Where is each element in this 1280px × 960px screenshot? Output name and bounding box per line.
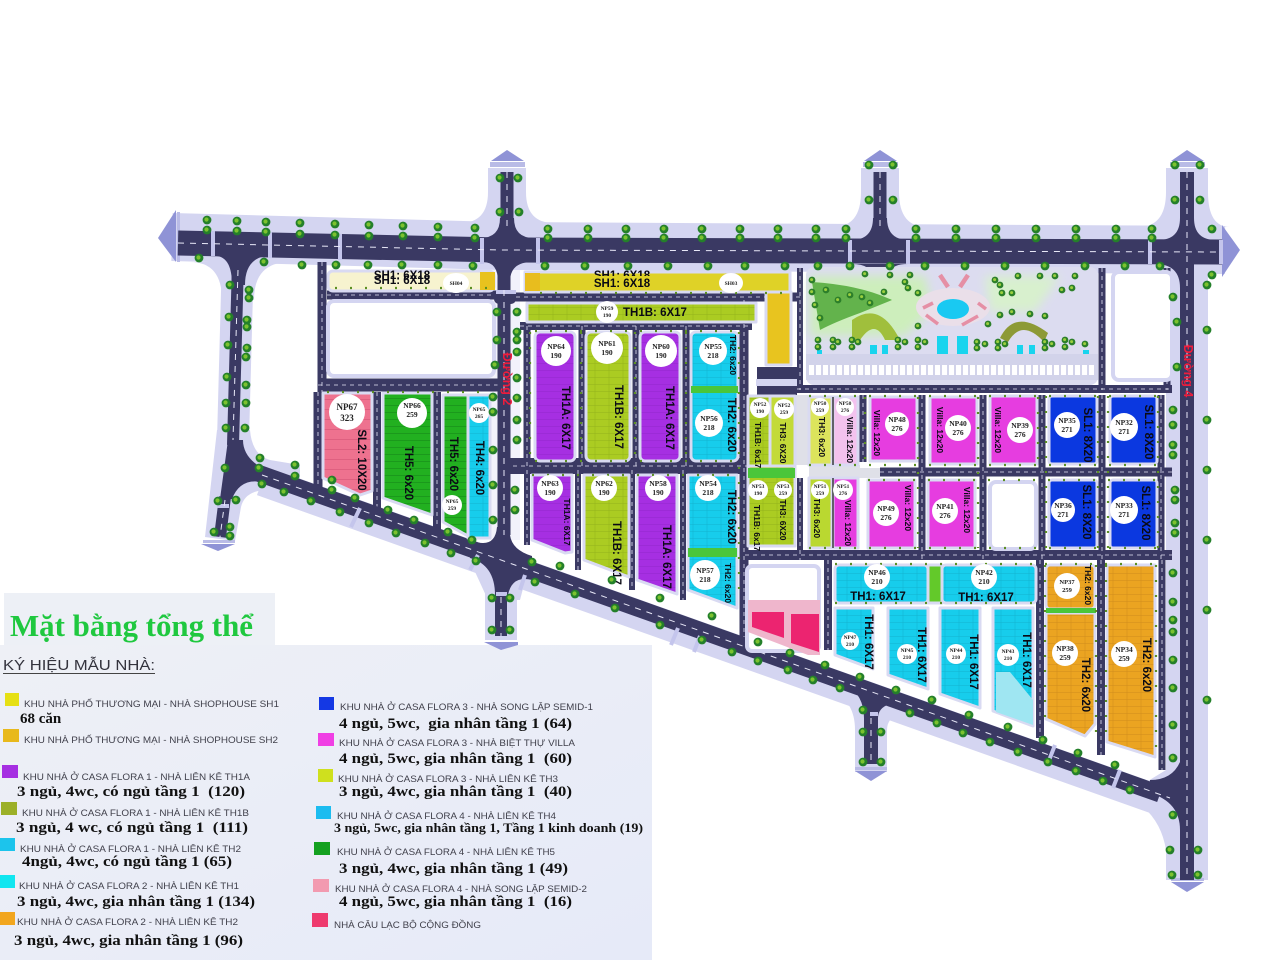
legend: SH1	[5, 693, 279, 727]
legend: club	[312, 913, 481, 930]
legend: TH2 flora 1: 4ngủ, 4wc, có ngủ tầng 1 (65)	[22, 854, 232, 870]
block labels: TH2: 6x20	[725, 398, 737, 452]
block: TH4 east	[468, 395, 490, 538]
legend: SEMID-2	[313, 879, 587, 910]
block: NP48	[870, 397, 917, 461]
block: NP40	[930, 397, 977, 464]
plot number markers: NP51	[837, 484, 850, 490]
block: TH1B mid lower	[748, 466, 795, 546]
plot number markers: NP58	[649, 479, 667, 488]
legend: SH2	[3, 729, 278, 745]
plot number markers: NP40	[949, 419, 967, 428]
legend: TH2 flora 1	[0, 838, 241, 870]
plot number markers: 210	[871, 577, 883, 586]
plot number markers: NP53	[777, 484, 790, 490]
plot number markers: NP34	[1115, 645, 1133, 654]
plot number markers: NP53	[752, 484, 765, 490]
block labels: TH3: 6x20	[812, 498, 822, 538]
plot number markers: 271	[1057, 510, 1069, 519]
plot number markers: NP48	[888, 415, 906, 424]
block: NP61	[586, 332, 630, 461]
legend: TH3: KHU NHÀ Ở CASA FLORA 3 - NHÀ LIÊN KÊ TH3	[338, 773, 558, 784]
plot number markers: SH04	[450, 281, 463, 287]
plot number markers: NP57	[696, 566, 714, 575]
plot number markers: 276	[1014, 430, 1026, 439]
junction fillets	[480, 218, 534, 238]
block: NP43	[993, 608, 1033, 726]
plot number markers: 190	[603, 313, 611, 319]
block labels: Villa: 12x20	[843, 500, 853, 546]
block: NP64	[535, 332, 575, 461]
plot number markers: NP66	[403, 401, 421, 410]
plot number markers: NP44	[950, 648, 963, 654]
plot number markers: NP67	[336, 402, 358, 412]
south road cap overlapping legend	[484, 642, 518, 650]
block: TH3 north	[809, 397, 832, 465]
legend: SEMID-1	[319, 697, 593, 732]
park: pool	[937, 299, 969, 319]
block: NP42	[942, 565, 1036, 603]
legend: TH5: 3 ngủ, 4wc, gia nhân tầng 1 (49)	[339, 861, 568, 877]
block labels: Villa: 12x20	[845, 417, 855, 463]
legend: TH1A: KHU NHÀ Ở CASA FLORA 1 - NHÀ LIÊN KÊ TH1A	[23, 771, 250, 782]
block labels: TH1B: 6x17	[753, 422, 763, 468]
block: NP44	[940, 608, 980, 708]
block: NP33	[1110, 480, 1157, 548]
label: SH1: SH1: 6X18	[374, 270, 431, 282]
block labels: TH2: 6x20	[723, 563, 733, 603]
block: NP49	[868, 480, 915, 548]
plot number markers: 259	[816, 408, 824, 414]
plot number markers: NP39	[1011, 421, 1029, 430]
plot number markers: NP36	[1054, 501, 1072, 510]
block labels: TH2: 6x20	[1140, 638, 1152, 692]
block: NP39	[990, 396, 1037, 464]
block labels: TH1B: 6x17	[752, 505, 762, 551]
plot number markers: 323	[340, 413, 354, 423]
block: NP35	[1049, 396, 1097, 464]
block: villa divider lines	[832, 397, 834, 548]
block labels: TH5: 6x20	[402, 446, 414, 500]
block labels	[355, 270, 1154, 712]
plot number markers: NP46	[868, 568, 886, 577]
plot number markers: NP62	[595, 479, 613, 488]
legend: VILLA: KHU NHÀ Ở CASA FLORA 3 - NHÀ BIỆT THỰ VILLA	[339, 737, 575, 748]
block: NP38	[1046, 613, 1095, 736]
block labels: Villa: 12x20	[962, 487, 972, 533]
plot number markers: NP42	[975, 568, 993, 577]
block: NP46	[835, 565, 928, 603]
panel: central park	[806, 267, 1098, 385]
legend: TH1A: 3 ngủ, 4wc, có ngủ tầng 1 (120)	[17, 784, 245, 800]
block: NP34	[1107, 565, 1155, 757]
plot number markers: 190	[754, 491, 762, 497]
legend: TH1B	[1, 802, 249, 836]
legend: TH5	[314, 842, 568, 877]
legend: TH2 flora 2	[0, 912, 243, 949]
plot number markers: 190	[655, 351, 667, 360]
road name labels	[500, 345, 1195, 405]
block labels: TH2: 6x20	[1079, 658, 1091, 712]
plot number markers: 271	[1118, 510, 1130, 519]
block: NP55	[691, 332, 738, 461]
block labels: TH1: 6X17	[967, 634, 979, 690]
label: Đường 4: Đường 4	[1181, 345, 1195, 397]
block labels: TH1: 6X17	[1020, 632, 1032, 688]
plot number markers: 259	[816, 491, 824, 497]
plot number markers: NP47	[844, 635, 857, 641]
plot number markers: 259	[780, 410, 788, 416]
legend: TH1 flora 2	[0, 875, 255, 910]
legend: TH3	[318, 769, 572, 800]
legend: TH4: 3 ngủ, 5wc, gia nhân tầng 1, Tầng 1 kinh doanh (19)	[334, 821, 643, 835]
plot number markers: NP51	[814, 484, 827, 490]
block labels: TH3: 6X20	[778, 499, 788, 541]
block labels: TH1B: 6X17	[623, 307, 687, 319]
block: TH5 east	[443, 395, 468, 536]
plot number markers: 210	[952, 655, 960, 661]
block: SH2	[766, 292, 791, 365]
block labels: TH1A: 6X17	[562, 498, 572, 546]
plot number markers: NP37	[1059, 579, 1075, 586]
block labels: Villa: 12x20	[935, 407, 945, 453]
plot number markers: 276	[891, 424, 903, 433]
block: Villa north	[833, 397, 858, 465]
legend: SEMID-2: KHU NHÀ Ở CASA FLORA 4 - NHÀ SONG LẬP SEMID-2	[335, 883, 587, 894]
plot number markers: NP54	[699, 479, 717, 488]
block: NP47	[835, 608, 873, 669]
legend: TH2 flora 2: 3 ngủ, 4wc, gia nhân tầng 1 (96)	[14, 933, 243, 949]
service road lane markings	[318, 262, 1172, 770]
plot number markers	[329, 273, 1138, 667]
park: plaza	[916, 288, 990, 326]
plot number markers: NP52	[778, 403, 791, 409]
legend: TH1 flora 2: KHU NHÀ Ở CASA FLORA 2 - NHÀ LIÊN KÊ TH1	[19, 880, 239, 891]
plot number markers: 218	[702, 488, 714, 497]
plot number markers: 190	[544, 488, 556, 497]
plot number markers: NP59	[601, 306, 614, 312]
plot number markers: NP52	[754, 402, 767, 408]
plot number markers: 259	[1118, 654, 1130, 663]
pale plaza between blocks	[796, 395, 880, 478]
block: SL2	[323, 393, 372, 495]
legend: SEMID-1: KHU NHÀ Ở CASA FLORA 3 - NHÀ SONG LẬP SEMID-1	[340, 701, 593, 712]
plot number markers: NP45	[901, 648, 914, 654]
block: TH5 west	[383, 393, 432, 515]
block: community club	[748, 600, 820, 655]
block labels: Villa: 12x20	[903, 485, 913, 531]
block: NP54	[688, 475, 737, 608]
legend: TH1 flora 2: 3 ngủ, 4wc, gia nhân tầng 1 (134)	[17, 894, 255, 910]
block labels: SL1: 8X20	[1081, 408, 1093, 462]
plot number markers: NP49	[877, 504, 895, 513]
block labels: SL1: 8X20	[1142, 405, 1154, 459]
block labels: TH1A: 6X17	[660, 525, 672, 589]
legend: SEMID-1: 4 ngủ, 5wc, gia nhân tầng 1 (64)	[339, 716, 572, 732]
plot number markers: 276	[939, 511, 951, 520]
legend heading: KÝ HIỆU MẪU NHÀ:	[3, 657, 155, 674]
plot number markers: SH03	[725, 281, 738, 287]
plot number markers: 190	[652, 488, 664, 497]
lot blocks	[323, 271, 1157, 757]
plot number markers: NP50	[839, 401, 852, 407]
plot number markers: NP33	[1115, 501, 1133, 510]
road network: sidewalks	[172, 168, 1230, 880]
plot number markers: NP65	[446, 499, 459, 505]
plot number markers: 276	[839, 491, 847, 497]
plot number markers: NP38	[1056, 644, 1074, 653]
plot number markers: NP61	[598, 339, 616, 348]
crosswalks	[213, 231, 1221, 788]
park: green lawn	[812, 282, 892, 330]
block labels: TH3: 6X20	[778, 422, 788, 464]
plot number markers: 218	[707, 351, 719, 360]
legend: TH3: 3 ngủ, 4wc, gia nhân tầng 1 (40)	[339, 784, 572, 800]
plot number markers: NP64	[547, 342, 565, 351]
plot number markers: 190	[756, 409, 764, 415]
block: NP58	[637, 475, 677, 594]
legend: TH1B: KHU NHÀ Ở CASA FLORA 1 - NHÀ LIÊN KÊ TH1B	[22, 807, 249, 818]
block labels: TH1: 6X17	[958, 592, 1014, 604]
block: NP41	[928, 480, 975, 548]
plot number markers: 265	[475, 414, 483, 420]
panel: legend	[0, 645, 652, 960]
plot number markers: 276	[952, 428, 964, 437]
white reserve lots	[328, 272, 1172, 651]
legend: TH5: KHU NHÀ Ở CASA FLORA 4 - NHÀ LIÊN KÊ TH5	[337, 846, 555, 857]
legend: SEMID-2: 4 ngủ, 5wc, gia nhân tầng 1 (16)	[339, 894, 572, 910]
label: Đường 2: Đường 2	[500, 353, 514, 405]
title: Mặt bằng tổng thể	[10, 608, 254, 643]
plot number markers: NP55	[704, 342, 722, 351]
plot number markers: 218	[699, 575, 711, 584]
block: TH1B mid upper	[748, 396, 770, 466]
plot number markers: NP63	[541, 479, 559, 488]
park: east crescent	[1000, 322, 1048, 342]
block labels: TH4: 6x20	[473, 441, 485, 495]
block: TH3 mid upper	[770, 396, 795, 466]
legend: club: NHÀ CÂU LẠC BỘ CỘNG ĐỒNG	[334, 919, 481, 930]
block labels: SH1: 6X18	[594, 278, 651, 290]
block labels: TH1B: 6X17	[610, 521, 622, 585]
block: TH1 divider	[928, 565, 942, 603]
legend: VILLA	[318, 733, 575, 767]
legend: TH2 flora 2: KHU NHÀ Ở CASA FLORA 2 - NHÀ LIÊN KÊ TH2	[17, 916, 238, 927]
block labels: SL1: 8X20	[1139, 486, 1151, 540]
block: NP32	[1110, 396, 1157, 464]
block labels: TH1: 6X17	[862, 614, 874, 670]
plot number markers: NP50	[814, 401, 827, 407]
block: NP43 pale part	[996, 672, 1033, 725]
block: TH1B top	[527, 303, 756, 322]
plot number markers: 271	[1061, 425, 1073, 434]
plot number markers: 190	[601, 348, 613, 357]
lane markings	[178, 172, 1222, 880]
block: NP62	[584, 475, 629, 577]
plot number markers: 210	[1004, 656, 1012, 662]
block: NP63	[532, 475, 572, 553]
title panel	[4, 593, 275, 648]
block: SH1 east end	[525, 273, 540, 291]
legend: TH1B: 3 ngủ, 4 wc, có ngủ tầng 1 (111)	[16, 820, 248, 836]
legend: TH4	[316, 806, 643, 835]
plot number markers: 218	[703, 423, 715, 432]
street trees	[195, 161, 1216, 879]
plot number markers: 259	[779, 491, 787, 497]
block labels: SH1: 6X18	[374, 275, 431, 287]
plot number markers: NP32	[1115, 418, 1133, 427]
plot number markers: 210	[903, 655, 911, 661]
block: Villa south	[833, 478, 858, 548]
block labels: Villa: 12x20	[993, 407, 1003, 453]
block: SH1 west end	[480, 272, 495, 290]
block: NP60	[640, 332, 680, 461]
block labels: SL1: 8X20	[1080, 485, 1092, 539]
block labels: TH2: 6x20	[1083, 565, 1093, 605]
block: NP36	[1049, 480, 1097, 548]
block labels: TH3: 6x20	[817, 417, 827, 457]
plot number markers: 190	[598, 488, 610, 497]
plot number markers: 276	[841, 408, 849, 414]
block labels: SL2: 10X20	[355, 429, 367, 491]
plot number markers: NP41	[936, 502, 954, 511]
road network: main roads	[178, 172, 1222, 880]
road end caps	[158, 150, 1240, 892]
block labels: TH2: 6x20	[728, 335, 738, 375]
block: NP37	[1046, 565, 1095, 609]
plot number markers: 271	[1118, 427, 1130, 436]
plot number markers: NP56	[700, 414, 718, 423]
block labels: TH5: 6x20	[447, 437, 459, 491]
block labels: TH1: 6X17	[850, 591, 906, 603]
plot number markers: 210	[978, 577, 990, 586]
plot number markers: NP35	[1058, 416, 1076, 425]
block labels: SH1: 6X18	[594, 270, 651, 282]
block labels: Villa: 12x20	[872, 410, 882, 456]
block labels: TH1: 6X17	[915, 627, 927, 683]
legend: SH1: KHU NHÀ PHỐ THƯƠNG MẠI - NHÀ SHOPHOUSE SH1	[24, 698, 279, 709]
plot number markers: NP43	[1002, 649, 1015, 655]
plot number markers: 190	[550, 351, 562, 360]
small edge shrubs	[327, 288, 1158, 755]
block: NP45	[888, 608, 928, 689]
plot number markers: 259	[406, 410, 418, 419]
road network: inner service roads	[318, 262, 1172, 770]
block labels: TH1B: 6X17	[612, 385, 624, 449]
legend: TH2 flora 1: KHU NHÀ Ở CASA FLORA 1 - NHÀ LIÊN KÊ TH2	[20, 843, 241, 854]
block: TH3 south	[809, 478, 832, 548]
legend: SH1: 68 căn	[20, 711, 62, 727]
block labels: TH1A: 6X17	[559, 386, 571, 450]
plot number markers: 259	[1062, 587, 1073, 594]
plot number markers: NP65	[473, 407, 486, 413]
park: west crescent	[852, 313, 900, 340]
plot number markers: 259	[1059, 653, 1071, 662]
block: SH1 west	[328, 271, 494, 291]
legend: TH4: KHU NHÀ Ở CASA FLORA 4 - NHÀ LIÊN KÊ TH4	[337, 810, 556, 821]
block: SH1 east	[525, 272, 790, 292]
sidewalk fillets	[460, 192, 554, 223]
legend: SH2: KHU NHÀ PHỐ THƯƠNG MẠI - NHÀ SHOPHOUSE SH2	[24, 734, 278, 745]
block labels: TH2: 6x20	[725, 490, 737, 544]
plot number markers: 210	[846, 642, 854, 648]
block: green strips	[688, 386, 1096, 613]
block labels: TH1A: 6X17	[663, 386, 675, 450]
plot number markers: NP60	[652, 342, 670, 351]
legend: VILLA: 4 ngủ, 5wc, gia nhân tầng 1 (60)	[339, 751, 572, 767]
plot number markers: 276	[880, 513, 892, 522]
plot number markers: 259	[448, 506, 456, 512]
legend: TH1A	[2, 765, 250, 800]
